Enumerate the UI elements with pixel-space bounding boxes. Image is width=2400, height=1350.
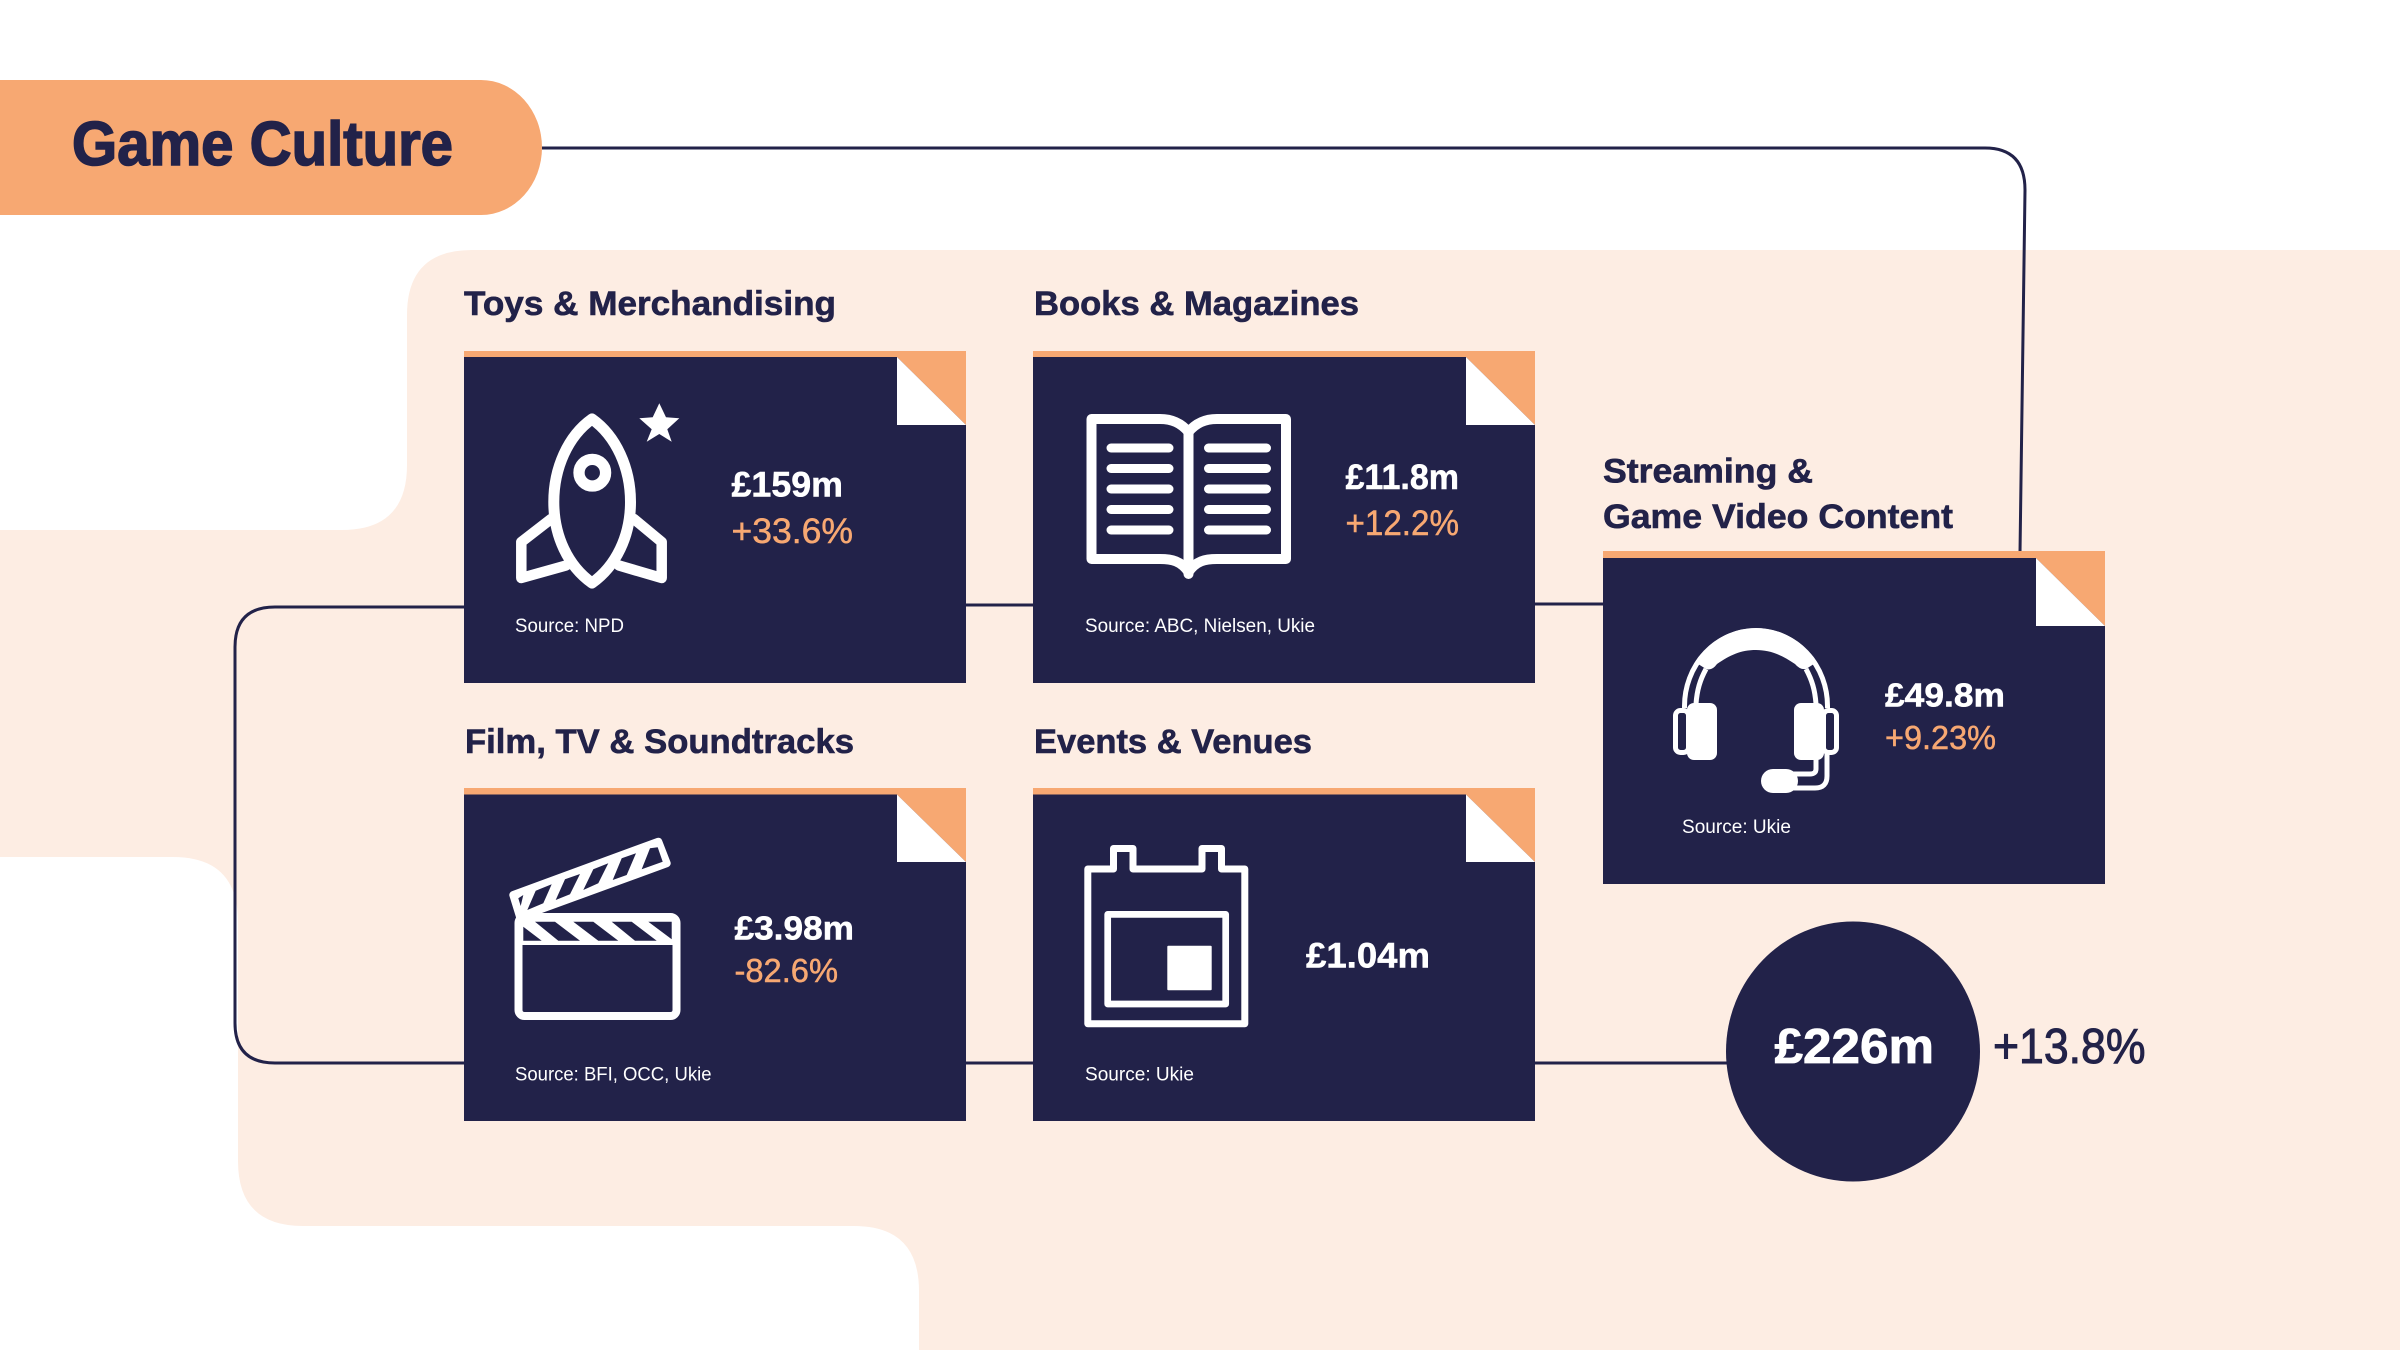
panel: toys and merchandising: [464, 285, 966, 683]
value: £3.98m: [734, 910, 854, 946]
title banner: [0, 80, 542, 215]
heading: Books & Magazines: [1034, 285, 1359, 323]
total value: £226m: [1774, 1020, 1934, 1074]
source: Source: BFI, OCC, Ukie: [515, 1064, 712, 1086]
title: Game Culture: [72, 110, 453, 179]
connector line: film to events to total circle: [964, 1062, 1730, 1064]
panel: books and magazines: [1033, 285, 1535, 683]
value: £49.8m: [1885, 676, 2005, 714]
connector line: toys card through left loop to film card: [235, 607, 466, 1063]
panel: events and venues: [1033, 723, 1535, 1121]
connector line: banner to streaming card: [542, 148, 2025, 553]
icon: open book: [1092, 419, 1286, 574]
value: £11.8m: [1346, 458, 1459, 497]
connector line: books to streaming: [1533, 602, 1605, 606]
source: Source: Ukie: [1085, 1064, 1194, 1086]
icon: calendar: [1088, 848, 1245, 1024]
change: +9.23%: [1885, 719, 1996, 756]
total change: +13.8%: [1993, 1020, 2146, 1074]
change: +33.6%: [732, 512, 853, 551]
change: +12.2%: [1346, 504, 1459, 543]
panel: film tv and soundtracks: [464, 723, 966, 1121]
value: £159m: [732, 466, 843, 504]
icon: rocket with star: [521, 403, 679, 583]
icon: headset: [1676, 628, 1836, 793]
source: Source: ABC, Nielsen, Ukie: [1085, 616, 1315, 637]
icon: clapperboard: [513, 842, 676, 1016]
heading: Toys & Merchandising: [464, 285, 836, 323]
heading: Streaming &: [1603, 452, 1813, 490]
total circle: [1726, 922, 1980, 1182]
value: £1.04m: [1306, 936, 1430, 976]
change: -82.6%: [734, 952, 838, 989]
connector line: toys to books: [964, 604, 1035, 606]
source: Source: NPD: [515, 616, 624, 637]
heading: Events & Venues: [1034, 723, 1312, 761]
heading: Film, TV & Soundtracks: [465, 723, 854, 761]
heading line two: Game Video Content: [1603, 498, 1953, 536]
source: Source: Ukie: [1682, 817, 1791, 838]
panel: streaming and game video content: [1603, 452, 2105, 884]
